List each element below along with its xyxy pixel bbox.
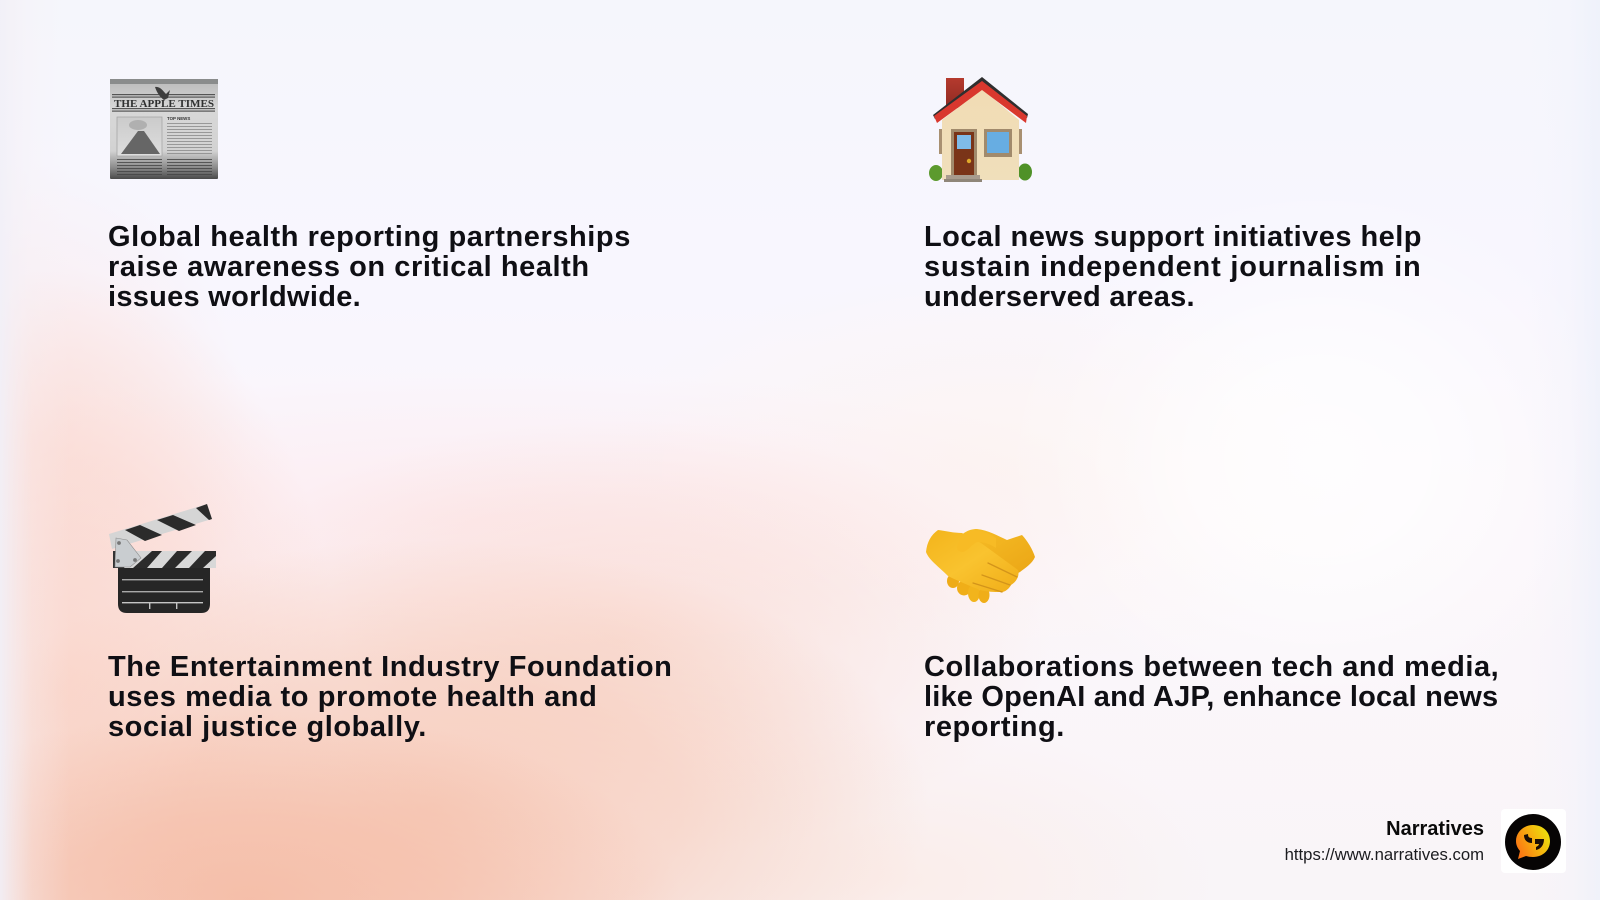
heading: collaborations: Collaborations between tech and media, [924,651,1499,683]
heading: entertainment: social justice globally. [108,711,427,743]
brand: narratives footer [1285,809,1566,873]
icon: clapperboard [109,504,216,613]
heading: local news [924,221,1422,313]
brand name: Narratives [1386,818,1484,840]
heading: collaborations [924,651,1499,743]
heading: global health [108,221,631,313]
heading: collaborations: reporting. [924,711,1065,743]
heading: global health: raise awareness on critical health [108,251,590,283]
icon: newspaper: TOP NEWS [167,116,190,121]
heading: global health: Global health reporting partnerships [108,221,631,253]
icon: narratives logo [1501,809,1566,873]
icon: newspaper: THE APPLE TIMES [114,99,214,110]
heading: collaborations: like OpenAI and AJP, enhance local news [924,681,1498,713]
heading: global health: issues worldwide. [108,281,361,313]
icon: handshake [926,529,1035,603]
icon: newspaper [110,79,218,179]
brand url: https://www.narratives.com [1285,845,1484,864]
heading: entertainment: uses media to promote health and [108,681,597,713]
heading: entertainment: The Entertainment Industry Foundation [108,651,672,683]
heading: local news: Local news support initiatives help [924,221,1422,253]
icon: house [929,77,1032,182]
heading: entertainment [108,651,672,743]
heading: local news: sustain independent journalism in [924,251,1422,283]
heading: local news: underserved areas. [924,281,1195,313]
